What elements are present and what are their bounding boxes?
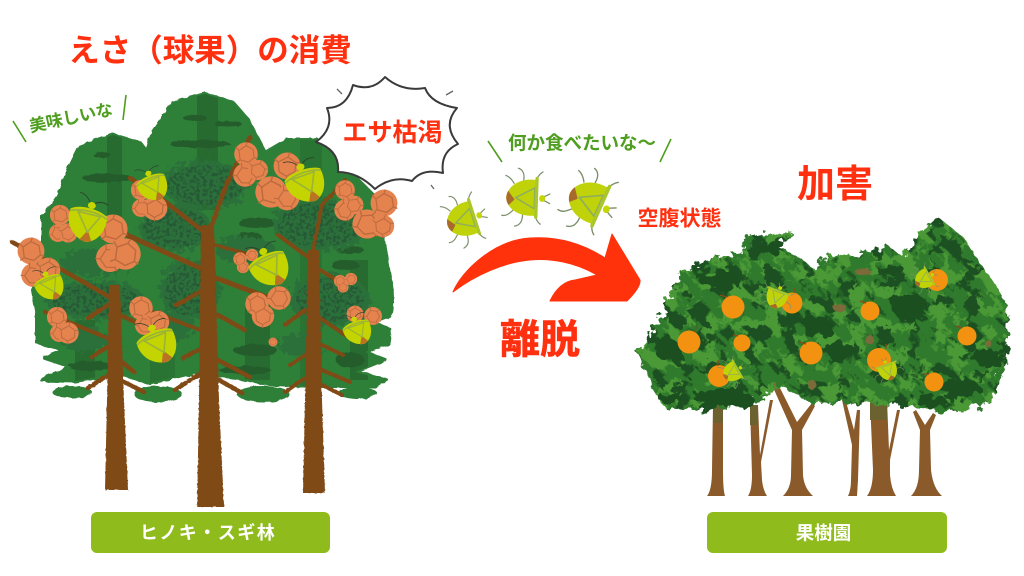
trunks and branches	[105, 225, 325, 507]
oranges	[678, 269, 976, 392]
cones	[16, 142, 397, 347]
forest illustration	[12, 90, 397, 507]
brown spots in canopy	[808, 269, 991, 390]
speech: delicious: 美味しいな	[27, 99, 115, 136]
label: orchard: 果樹園	[796, 522, 851, 544]
speech: hungry: 何か食べたいな〜	[508, 132, 656, 154]
burst callout	[316, 77, 458, 189]
departure label: 離脱	[500, 318, 580, 362]
stink bugs feeding	[29, 151, 376, 370]
speech: hungry	[488, 132, 671, 162]
dark leaf clumps	[655, 241, 999, 405]
needle foliage	[45, 161, 370, 357]
label: cypress and cedar forest: ヒノキ・スギ林	[140, 523, 276, 543]
orchard canopy	[637, 217, 1008, 413]
orchard illustration	[637, 217, 1008, 496]
label: cypress and cedar forest	[91, 512, 330, 553]
burst text: エサ枯渇	[342, 119, 443, 147]
flying bugs	[436, 162, 627, 252]
hungry state label: 空腹状態	[638, 208, 722, 230]
speech: delicious	[13, 95, 126, 142]
label: orchard	[707, 512, 947, 553]
arrow	[453, 234, 640, 301]
bugs on fruit	[714, 259, 943, 391]
canopy silhouette	[33, 94, 393, 402]
damage label: 加害	[797, 164, 873, 206]
orchard trunks	[707, 380, 942, 496]
title: えさ（球果）の消費	[68, 32, 352, 68]
